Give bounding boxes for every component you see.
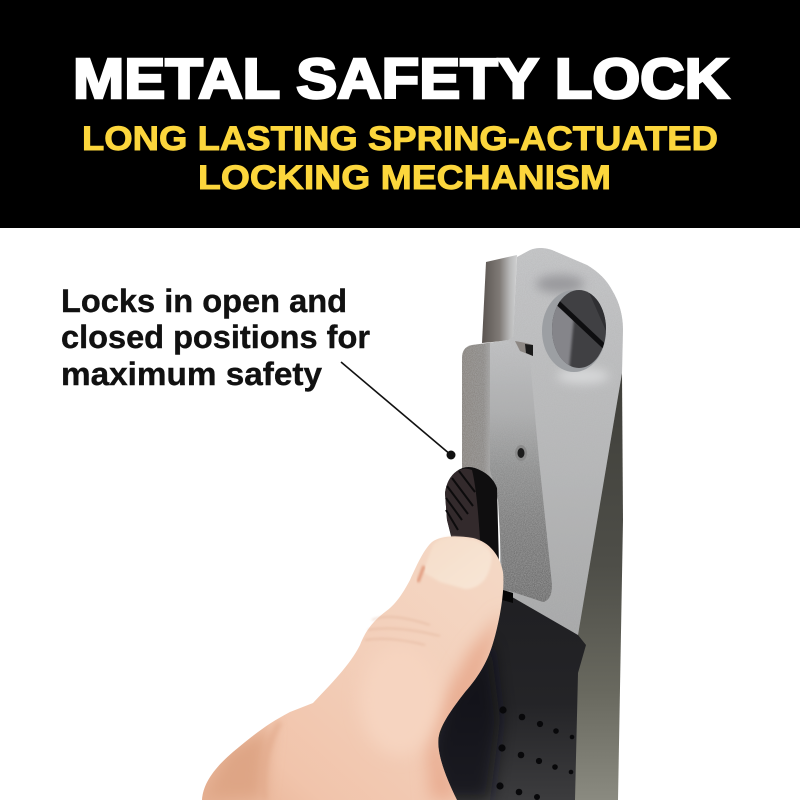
- button ridges: [446, 471, 475, 530]
- callout text: Locks in open and: [61, 283, 347, 319]
- knuckle creases: [365, 617, 440, 645]
- notch: [502, 341, 533, 603]
- header band: [0, 0, 800, 228]
- blade: [570, 372, 623, 800]
- lock plate side: [462, 342, 495, 490]
- lock button: [445, 467, 499, 565]
- callout text: maximum safety: [61, 356, 322, 392]
- lock plate face: [490, 340, 552, 602]
- screw: [542, 290, 610, 372]
- main metal plate: [500, 248, 623, 635]
- thumb: [202, 536, 505, 800]
- grip dots: [496, 706, 574, 800]
- subtitle: LOCKING MECHANISM: [198, 159, 611, 197]
- subtitle: [82, 120, 718, 197]
- back tab: [482, 255, 517, 343]
- thumbnail: [423, 537, 492, 589]
- pin hole: [515, 445, 527, 461]
- callout text: [61, 283, 370, 392]
- plate shading: [536, 275, 609, 384]
- callout text: closed positions for: [61, 319, 370, 355]
- rubber grip: [430, 585, 586, 800]
- leader line with dot: [341, 362, 456, 460]
- grip shadow: [438, 650, 504, 800]
- cuticle: [418, 566, 424, 582]
- subtitle: LONG LASTING SPRING-ACTUATED: [82, 120, 718, 158]
- saw illustration: [202, 248, 623, 800]
- title: METAL SAFETY LOCK: [73, 47, 729, 111]
- thumb shading: [202, 610, 505, 800]
